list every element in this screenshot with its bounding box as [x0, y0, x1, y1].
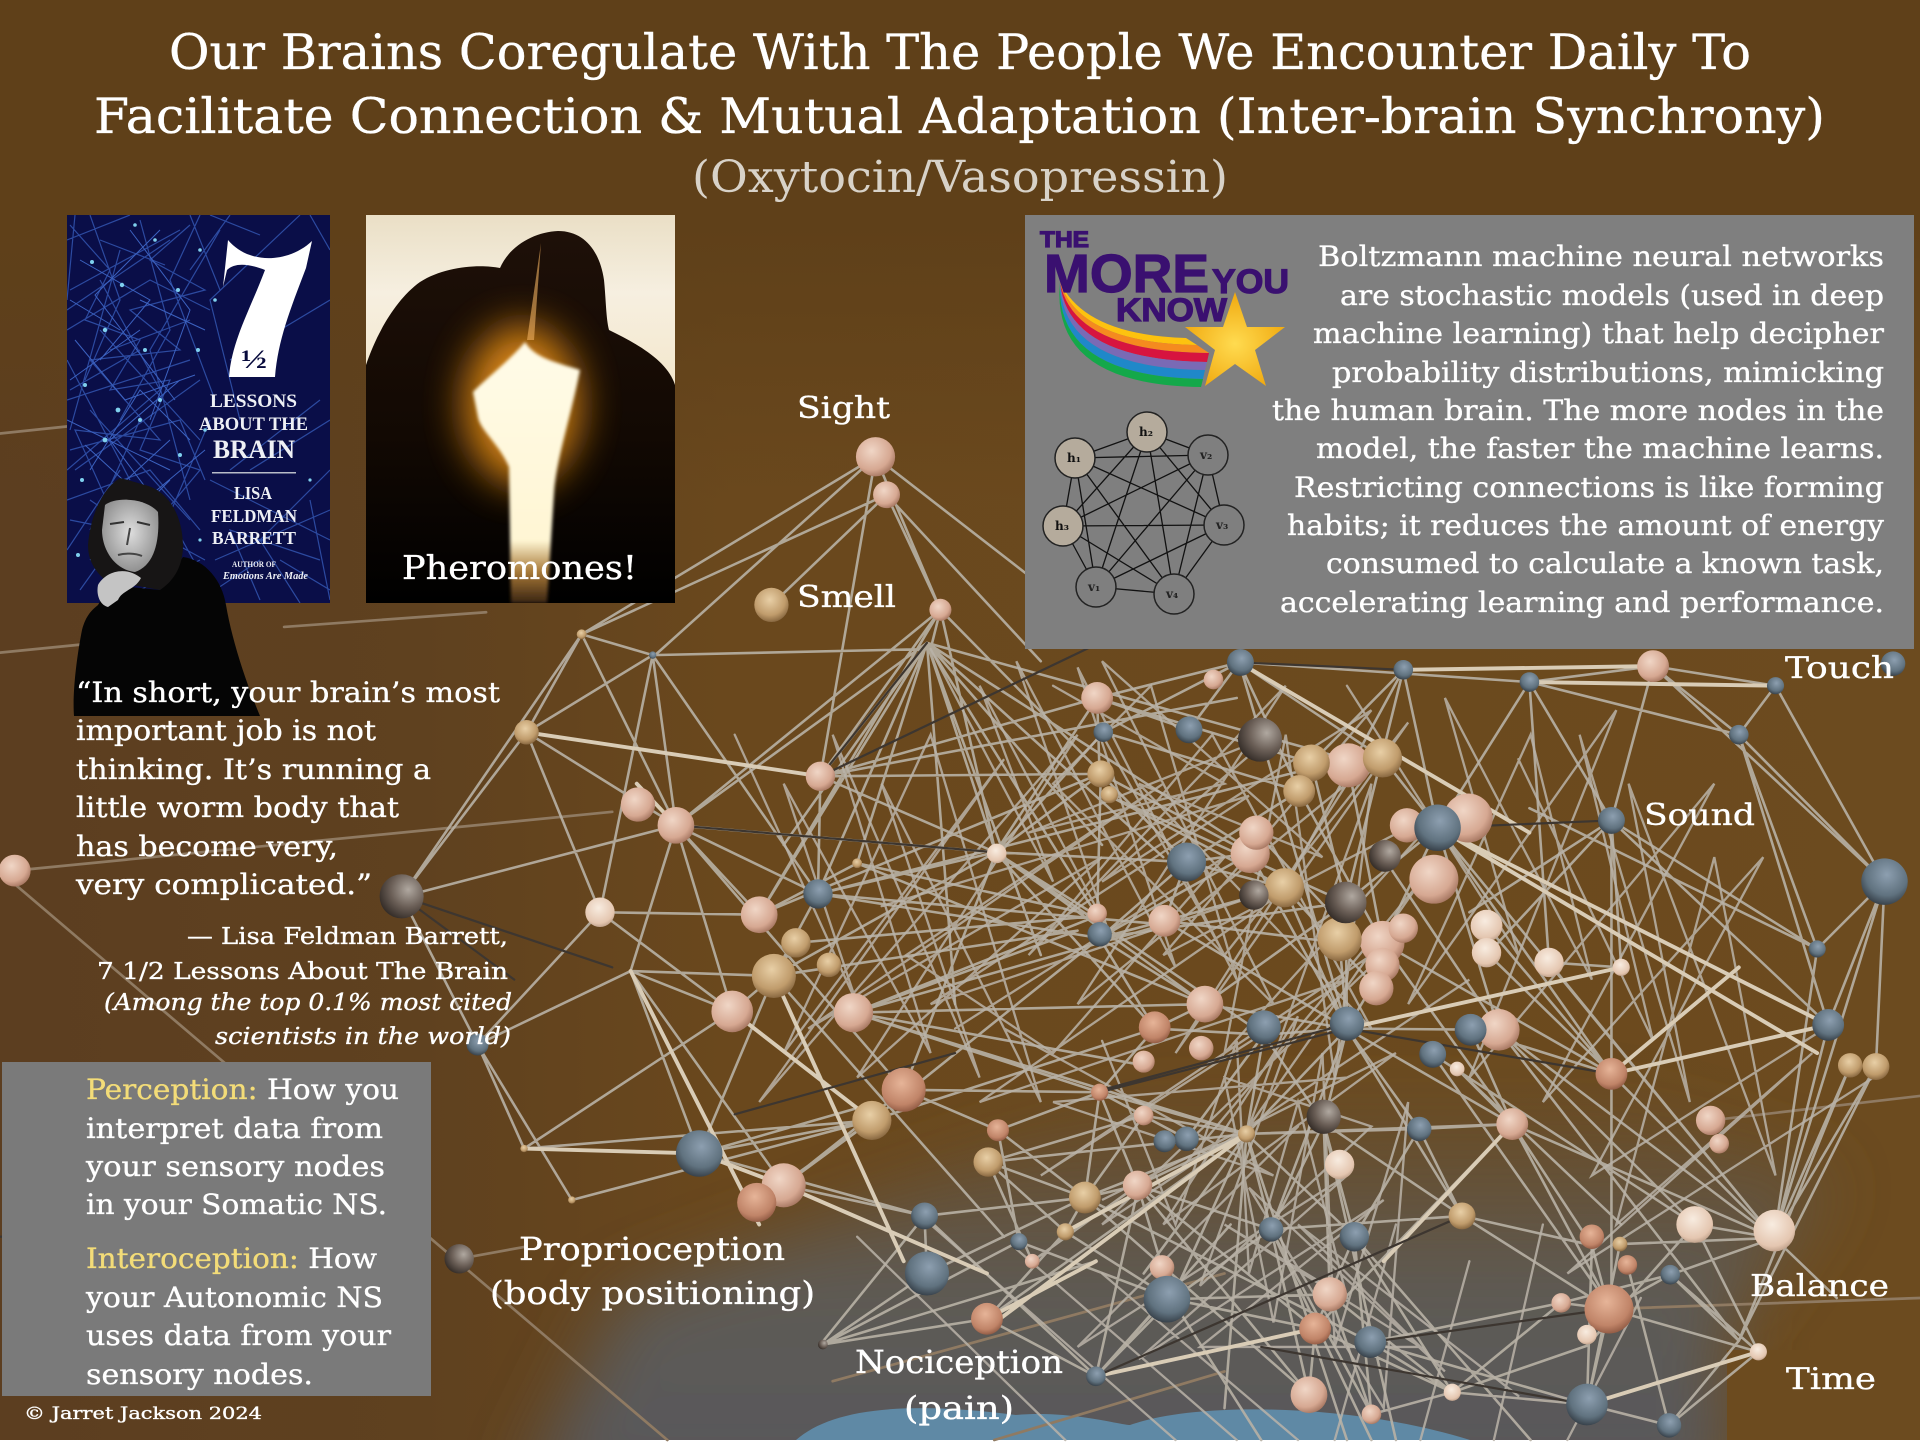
book cover: 7 1/2 Lessons About the Brain: FELDMAN [211, 506, 297, 526]
quote: little worm body that [76, 791, 400, 824]
photo: couple silhouette with Pheromones caption: Pheromones! [402, 548, 637, 587]
numeral seven [223, 240, 312, 377]
text block: Boltzmann description: are stochastic models (used in deep [1340, 279, 1884, 312]
diagram: Boltzmann machine nodes: v₃ [1215, 518, 1228, 532]
diagram: Boltzmann machine nodes: v₁ [1087, 580, 1100, 594]
panel: perception and interoception definitions: your sensory nodes [85, 1150, 385, 1183]
quote: thinking. It’s running a [76, 753, 431, 786]
photo: couple silhouette with Pheromones caption [366, 215, 675, 603]
panel: perception and interoception definitions: interpret data from [86, 1112, 383, 1145]
diagram: Boltzmann machine nodes: h₂ [1139, 425, 1153, 439]
book cover: 7 1/2 Lessons About the Brain: AUTHOR OF [232, 560, 276, 569]
title: Our Brains Coregulate With The People We Encounter Daily To [169, 24, 1751, 81]
book cover: 7 1/2 Lessons About the Brain: BRAIN [213, 435, 295, 464]
label: Time: Time [1786, 1362, 1876, 1397]
text block: Boltzmann description: machine learning) that help decipher [1313, 317, 1885, 350]
quote: important job is not [76, 714, 377, 747]
label: Sound: Sound [1644, 798, 1755, 833]
text block: Boltzmann description [1272, 240, 1885, 619]
book cover: 7 1/2 Lessons About the Brain: LISA [234, 483, 272, 503]
label: Nociception [855, 1343, 1063, 1427]
nodes [0, 437, 1908, 1438]
panel: perception and interoception definitions [2, 1062, 431, 1396]
quote attribution: scientists in the world) [215, 1024, 511, 1050]
book cover: 7 1/2 Lessons About the Brain [67, 215, 330, 603]
diagram: Boltzmann machine nodes: h₃ [1055, 519, 1069, 533]
subtitle: (Oxytocin/Vasopressin) [692, 152, 1228, 203]
logo: The More You Know: MORE [1044, 244, 1209, 304]
network sculpture of sensory nodes [0, 392, 1920, 1440]
quote attribution: 7 1/2 Lessons About The Brain [97, 959, 508, 985]
label: Nociception: Nociception [855, 1343, 1063, 1381]
diagram: Boltzmann machine nodes: v₄ [1165, 587, 1178, 601]
diagram: Boltzmann machine nodes: h₁ [1067, 451, 1081, 465]
quote attribution: — Lisa Feldman Barrett, [187, 924, 508, 950]
logo: The More You Know: KNOW [1116, 292, 1228, 328]
portrait: Lisa Feldman Barrett [74, 478, 260, 716]
diagram: Boltzmann machine nodes: v₂ [1199, 448, 1212, 462]
book cover: 7 1/2 Lessons About the Brain: BARRETT [212, 528, 296, 548]
text block: Boltzmann description: consumed to calculate a known task, [1326, 547, 1884, 580]
text block: Boltzmann description: accelerating learning and performance. [1280, 586, 1884, 619]
panel: perception and interoception definitions: uses data from your [86, 1319, 392, 1352]
quote: “In short, your brain’s most [76, 676, 501, 709]
label: Nociception: (pain) [904, 1389, 1014, 1427]
panel: perception and interoception definitions: in your Somatic NS. [86, 1188, 387, 1221]
logo: The More You Know [1040, 227, 1289, 387]
label: Proprioception: Proprioception [519, 1230, 785, 1268]
title: Facilitate Connection & Mutual Adaptation (Inter-brain Synchrony) [94, 88, 1825, 145]
text block: Boltzmann description: Boltzmann machine neural networks [1318, 240, 1884, 273]
panel: perception and interoception definitions: your Autonomic NS [85, 1281, 383, 1314]
book cover: 7 1/2 Lessons About the Brain: Emotions Are Made [222, 570, 308, 582]
label: Balance: Balance [1750, 1269, 1889, 1304]
text block: Boltzmann description: habits; it reduces the amount of energy [1287, 509, 1884, 542]
quote attribution [97, 924, 512, 1050]
label: Proprioception [490, 1230, 815, 1312]
label: Touch: Touch [1785, 651, 1894, 686]
panel: perception and interoception definitions: Interoception: How [86, 1242, 377, 1275]
book cover: 7 1/2 Lessons About the Brain: ½ [241, 345, 267, 374]
logo: The More You Know: THE [1040, 227, 1089, 252]
quote: very complicated.” [75, 868, 372, 901]
panel: perception and interoception definitions: Perception: How you [86, 1073, 399, 1106]
book cover: 7 1/2 Lessons About the Brain: ABOUT THE [199, 414, 308, 435]
label: Smell: Smell [797, 580, 896, 615]
logo: The More You Know: YOU [1212, 263, 1289, 301]
text block: Boltzmann description: Restricting connections is like forming [1294, 471, 1884, 504]
text block: Boltzmann description: probability distributions, mimicking [1332, 356, 1884, 389]
book cover: 7 1/2 Lessons About the Brain: LESSONS [210, 391, 297, 412]
label: Proprioception: (body positioning) [490, 1274, 815, 1312]
quote [75, 676, 501, 901]
copyright: © Jarret Jackson 2024 [24, 1404, 262, 1424]
quote attribution: (Among the top 0.1% most cited [104, 990, 512, 1016]
panel: perception and interoception definitions: sensory nodes. [86, 1358, 313, 1391]
quote: has become very, [76, 830, 338, 863]
text block: Boltzmann description: model, the faster the machine learns. [1316, 432, 1884, 465]
title [94, 24, 1825, 145]
diagram: Boltzmann machine nodes [1043, 412, 1244, 614]
label: Sight: Sight [797, 391, 890, 426]
text block: Boltzmann description: the human brain. The more nodes in the [1272, 394, 1884, 427]
